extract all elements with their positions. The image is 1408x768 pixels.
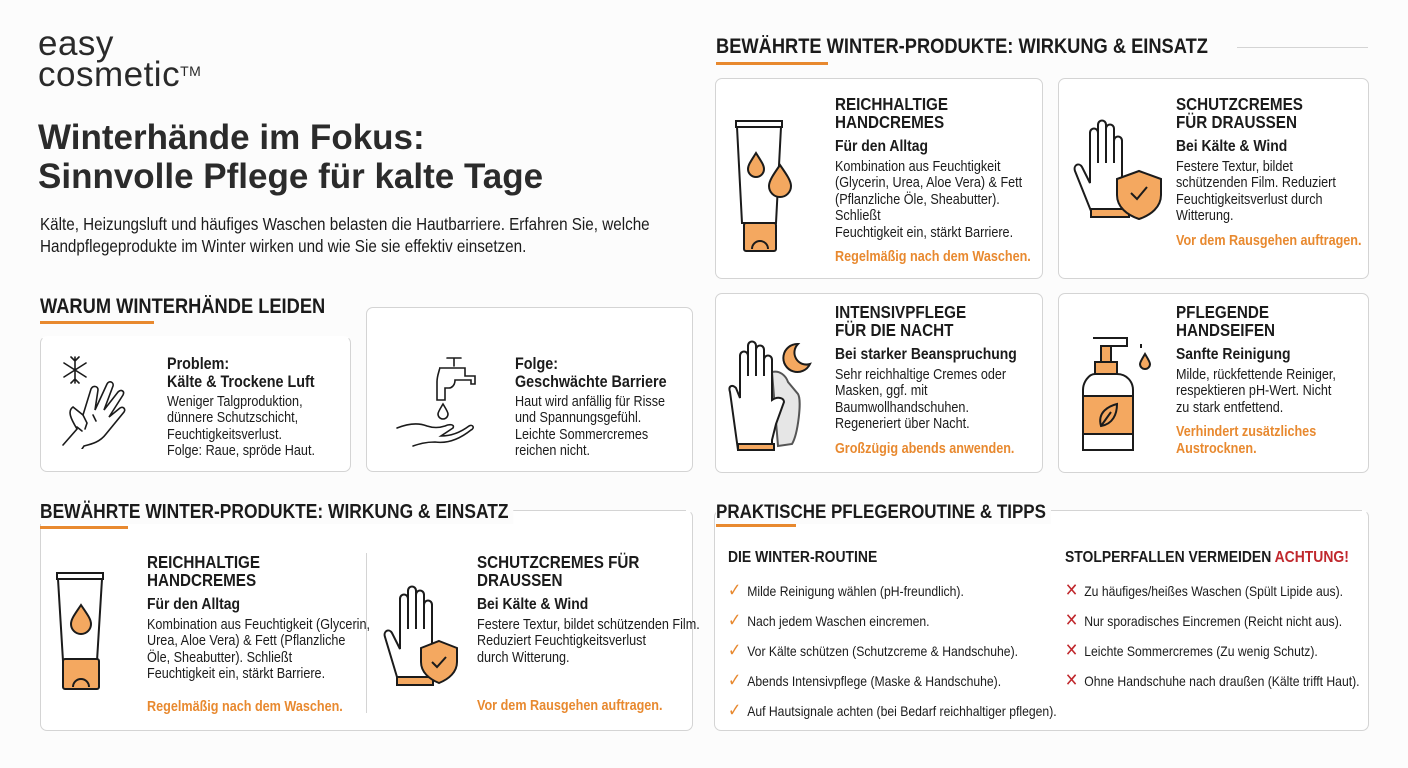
text: problem: Problem:	[167, 355, 229, 373]
text	[835, 302, 1017, 457]
panel: problem	[40, 336, 351, 472]
text: problem: Feuchtigkeitsverlust.	[167, 427, 282, 443]
text: schutzcremes: Vor dem Rausgehen auftragen.	[477, 698, 663, 714]
text: reichhaltige: REICHHALTIGE	[147, 552, 260, 572]
text: reichhaltige: Öle, Sheabutter). Schließt	[147, 650, 292, 666]
checklist: stolperfallen: ✕ Ohne Handschuhe nach draußen (Kälte trifft Haut).	[1065, 670, 1360, 690]
panel: folge	[366, 307, 693, 472]
text: reichhaltige: Für den Alltag	[147, 596, 240, 613]
section heading: produkte (left): BEWÄHRTE WINTER-PRODUKTE: WIRKUNG & EINSATZ	[40, 501, 508, 523]
panel: routine	[714, 510, 1369, 731]
text: Regeneriert über Nacht.	[835, 416, 970, 432]
text: Austrocknen.	[1176, 441, 1257, 457]
text: HANDSEIFEN	[1176, 320, 1275, 340]
text	[835, 94, 1031, 265]
section heading: routine: PRAKTISCHE PFLEGEROUTINE & TIPPS	[716, 501, 1046, 523]
checklist: winter routine: ✓ Auf Hautsignale achten (bei Bedarf reichhaltiger pflegen).	[728, 700, 1057, 720]
text: (Pflanzliche Öle, Sheabutter).	[835, 192, 1000, 208]
logo: easy	[38, 24, 114, 63]
text: folge: und Spannungsgefühl.	[515, 410, 641, 426]
icon: tube with drops	[735, 120, 792, 252]
text: folge: Geschwächte Barriere	[515, 373, 667, 391]
card: schutzcremes	[1058, 78, 1369, 279]
panel: products left	[40, 510, 693, 731]
logo: cosmeticTM	[38, 55, 201, 94]
title: Sinnvolle Pflege für kalte Tage	[38, 157, 543, 196]
text: FÜR DIE NACHT	[835, 320, 953, 340]
text: HANDCREMES	[835, 112, 944, 132]
icon: hand shield	[1074, 120, 1162, 220]
icon: cream tube	[56, 572, 104, 690]
icon: snowflake hand	[62, 356, 126, 449]
text: INTENSIVPFLEGE	[835, 302, 966, 322]
text: Verhindert zusätzliches	[1176, 424, 1316, 440]
text: problem	[167, 355, 315, 459]
text: reichhaltige: Kombination aus Feuchtigkeit (Glycerin,	[147, 617, 370, 633]
text: Sanfte Reinigung	[1176, 346, 1290, 363]
text: Großzügig abends anwenden.	[835, 441, 1014, 457]
icon: hand with shield	[384, 586, 458, 686]
text: Masken, ggf. mit	[835, 383, 928, 399]
text: folge: Haut wird anfällig für Risse	[515, 394, 665, 410]
text: Festere Textur, bildet	[1176, 159, 1293, 175]
text: schutzcremes: SCHUTZCREMES FÜR	[477, 552, 639, 572]
checklist: winter routine: ✓ Nach jedem Waschen eincremen.	[728, 610, 930, 630]
text: schutzcremes	[477, 552, 700, 714]
text: Witterung.	[1176, 208, 1234, 224]
text: PFLEGENDE	[1176, 302, 1269, 322]
text: schutzcremes: Reduziert Feuchtigkeitsverlust	[477, 633, 646, 649]
checklist: winter routine: ✓ Abends Intensivpflege (Maske & Handschuhe).	[728, 670, 1001, 690]
text: reichhaltige	[147, 552, 370, 715]
text	[1176, 94, 1362, 249]
checklist: winter routine: ✓ Vor Kälte schützen (Schutzcreme & Handschuhe).	[728, 640, 1018, 660]
text: Für den Alltag	[835, 138, 928, 155]
icon: soap pump bottle	[1082, 337, 1151, 451]
text: problem: Folge: Raue, spröde Haut.	[167, 443, 315, 459]
text: problem: Weniger Talgproduktion,	[167, 394, 303, 410]
text: Feuchtigkeit ein, stärkt Barriere.	[835, 225, 1013, 241]
text: Sehr reichhaltige Cremes oder	[835, 367, 1006, 383]
intro text: Kälte, Heizungsluft und häufiges Waschen belasten die Hautbarriere. Erfahren Sie, welche	[40, 214, 650, 234]
text: Baumwollhandschuhen.	[835, 400, 969, 416]
text: reichhaltige: HANDCREMES	[147, 570, 256, 590]
card: intensivpflege	[715, 293, 1043, 473]
text: schutzcremes: Festere Textur, bildet schützenden Film.	[477, 617, 700, 633]
text: Schließt	[835, 208, 881, 224]
text: Bei starker Beanspruchung	[835, 346, 1017, 363]
text: reichhaltige: Urea, Aloe Vera) & Fett (Pflanzliche	[147, 633, 345, 649]
text: problem: Kälte & Trockene Luft	[167, 373, 315, 391]
icon: tap and hand	[396, 357, 476, 447]
logo	[38, 24, 201, 94]
checklist: winter routine	[728, 549, 1057, 720]
text: FÜR DRAUSSEN	[1176, 112, 1297, 132]
text: Regelmäßig nach dem Waschen.	[835, 249, 1031, 265]
text: Vor dem Rausgehen auftragen.	[1176, 233, 1362, 249]
checklist: winter routine: ✓ Milde Reinigung wählen (pH-freundlich).	[728, 580, 964, 600]
checklist: stolperfallen: STOLPERFALLEN VERMEIDEN ACHTUNG!	[1065, 549, 1349, 566]
text: (Glycerin, Urea, Aloe Vera) & Fett	[835, 175, 1022, 191]
text: folge: reichen nicht.	[515, 443, 590, 459]
text: respektieren pH-Wert. Nicht	[1176, 383, 1331, 399]
text: Kombination aus Feuchtigkeit	[835, 159, 1001, 175]
text: reichhaltige: Feuchtigkeit ein, stärkt Barriere.	[147, 666, 325, 682]
checklist: stolperfallen: ✕ Leichte Sommercremes (Zu wenig Schutz).	[1065, 640, 1318, 660]
text: Bei Kälte & Wind	[1176, 138, 1287, 155]
section heading: warum: WARUM WINTERHÄNDE LEIDEN	[40, 295, 325, 318]
checklist: winter routine: DIE WINTER-ROUTINE	[728, 549, 877, 566]
text: Milde, rückfettende Reiniger,	[1176, 367, 1336, 383]
text: problem: dünnere Schutzschicht,	[167, 410, 298, 426]
checklist: stolperfallen: ✕ Nur sporadisches Eincremen (Reicht nicht aus).	[1065, 610, 1342, 630]
intro text	[40, 214, 650, 256]
checklist: stolperfallen	[1065, 549, 1360, 690]
text: folge: Folge:	[515, 355, 558, 373]
text: schutzcremes: durch Witterung.	[477, 650, 570, 666]
text: REICHHALTIGE	[835, 94, 948, 114]
text: zu stark entfettend.	[1176, 400, 1283, 416]
text: schützenden Film. Reduziert	[1176, 175, 1336, 191]
text: SCHUTZCREMES	[1176, 94, 1303, 114]
text: folge: Leichte Sommercremes	[515, 427, 648, 443]
text: schutzcremes: Bei Kälte & Wind	[477, 596, 588, 613]
card: reichhaltige handcremes	[715, 78, 1043, 279]
title: Winterhände im Fokus:	[38, 118, 425, 157]
section heading: produkte (right): BEWÄHRTE WINTER-PRODUKTE: WIRKUNG & EINSATZ	[716, 35, 1208, 58]
title	[38, 118, 543, 196]
icon: glove with moon	[728, 340, 812, 451]
checklist: stolperfallen: ✕ Zu häufiges/heißes Waschen (Spült Lipide aus).	[1065, 580, 1343, 600]
text: reichhaltige: Regelmäßig nach dem Waschen.	[147, 699, 343, 715]
card: handseifen	[1058, 293, 1369, 473]
text: Feuchtigkeitsverlust durch	[1176, 192, 1323, 208]
text: folge	[515, 355, 667, 459]
text	[1176, 302, 1336, 457]
text: schutzcremes: DRAUSSEN	[477, 570, 562, 590]
intro text: Handpflegeprodukte im Winter wirken und wie Sie sie effektiv einsetzen.	[40, 236, 526, 256]
